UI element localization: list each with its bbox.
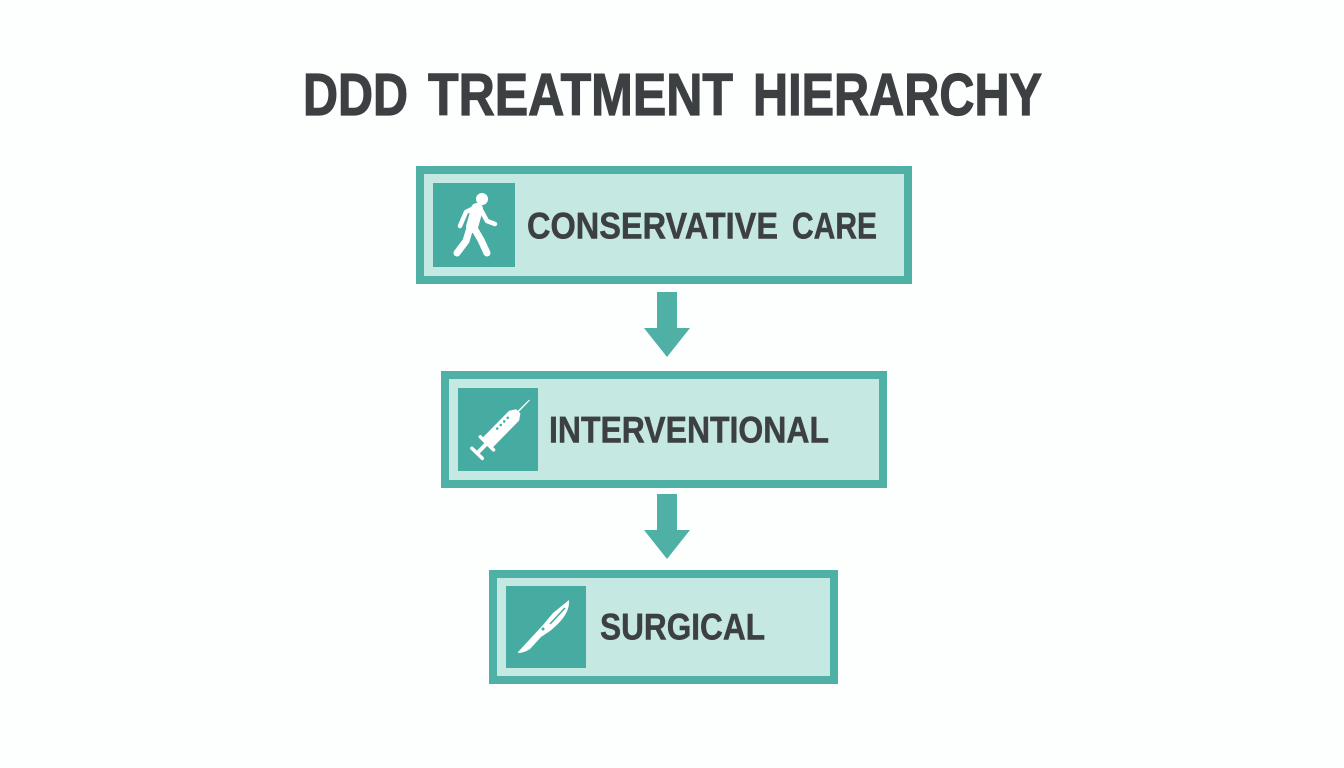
label: surgical: SURGICAL <box>600 606 765 648</box>
icon: syringe <box>458 388 538 471</box>
arrow: conservative to interventional <box>644 292 690 357</box>
arrow: interventional to surgical <box>644 494 690 559</box>
panel: interventional <box>445 375 883 484</box>
label: interventional: INTERVENTIONAL <box>549 410 829 450</box>
panel: surgical <box>493 574 834 680</box>
panel: conservative care <box>420 170 908 280</box>
title: HIERARCHY <box>753 62 1042 128</box>
icon: scalpel <box>506 586 586 668</box>
title: TREATMENT <box>428 62 733 128</box>
label: conservative care: CONSERVATIVE <box>527 206 778 246</box>
title <box>303 62 1042 128</box>
label: conservative care: CARE <box>792 206 877 246</box>
title: DDD <box>303 62 408 128</box>
icon: walking person <box>433 183 515 267</box>
